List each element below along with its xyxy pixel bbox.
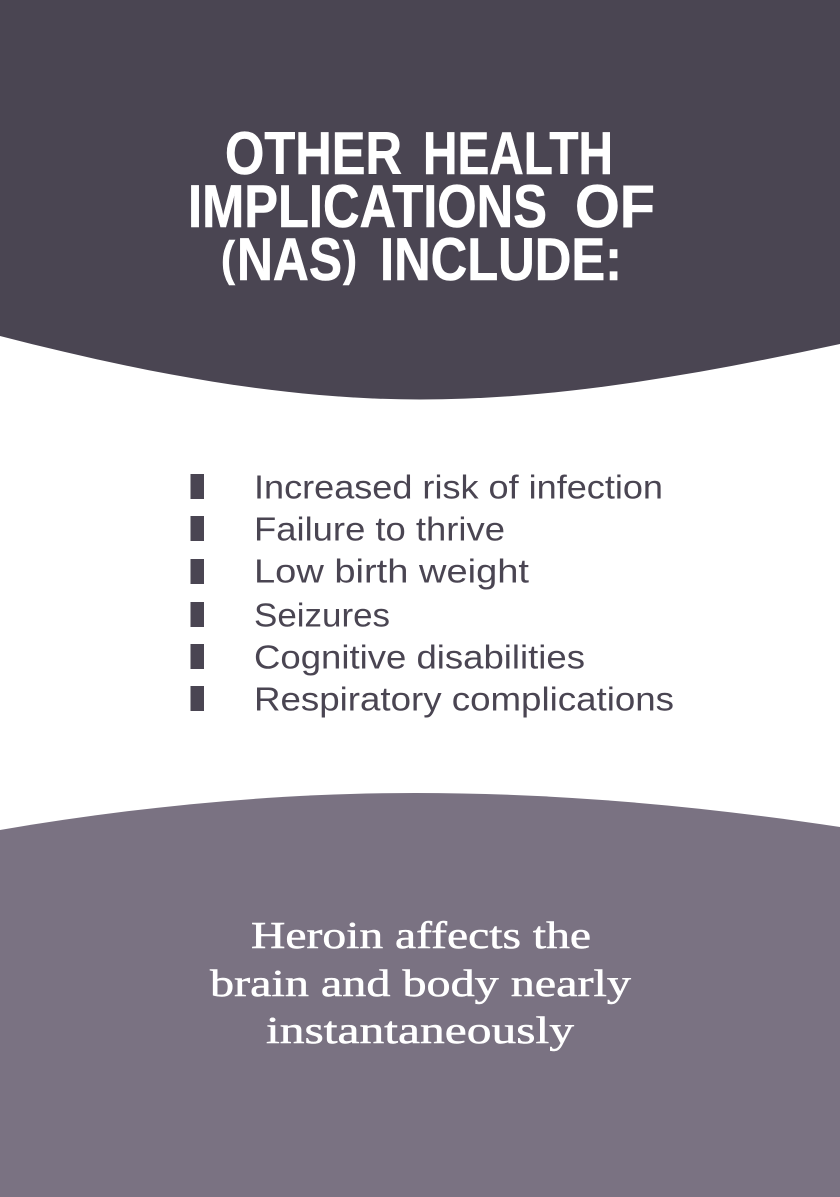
- panel: header: [0, 0, 840, 400]
- title: OF: [575, 173, 655, 240]
- list text: Increased risk of infection: [254, 468, 663, 506]
- list text: Cognitive disabilities: [254, 638, 585, 676]
- title: [188, 120, 655, 293]
- footer statement: brain and body nearly: [210, 963, 631, 1005]
- panel: footer: [0, 793, 840, 1197]
- title: NAS: [237, 226, 342, 293]
- footer wave background: [0, 793, 840, 1197]
- title: (: [221, 233, 235, 286]
- footer statement: Heroin affects the: [251, 915, 591, 957]
- title: OTHER: [225, 120, 402, 187]
- title: HEALTH: [423, 120, 613, 187]
- list text: Seizures: [254, 596, 390, 634]
- panel: list of health implications: [190, 468, 674, 718]
- title: IMPLICATIONS: [188, 173, 547, 240]
- list text: Respiratory complications: [254, 680, 674, 718]
- footer statement: instantaneously: [266, 1010, 574, 1052]
- header wave background: [0, 0, 840, 400]
- list text: Low birth weight: [254, 552, 529, 590]
- footer statement: [210, 915, 631, 1052]
- list text: [254, 468, 674, 718]
- list text: Failure to thrive: [254, 510, 505, 548]
- title: INCLUDE:: [380, 226, 622, 293]
- title: ): [343, 233, 357, 286]
- bullet markers: [190, 474, 204, 711]
